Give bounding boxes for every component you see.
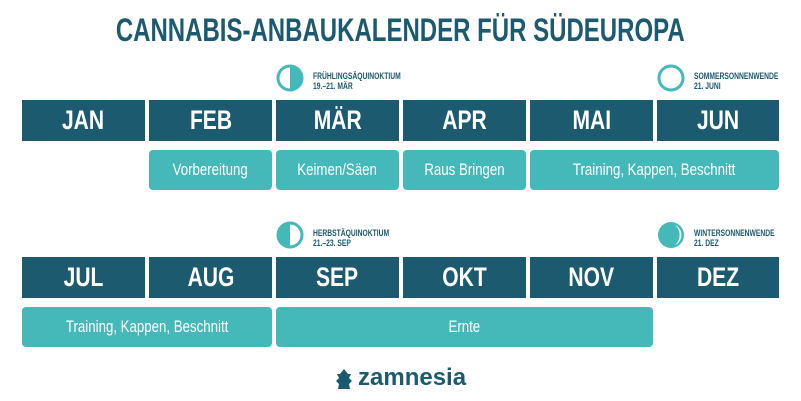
activities row 1: Keimen/Säen [298,160,377,179]
activities row 2: Training, Kappen, Beschnitt [66,317,228,336]
months row 1: MÄR [314,105,361,135]
activities row 1: Raus Bringen [424,160,505,179]
label: autumn equinox: HERBSTÄQUINOKTIUM [313,228,389,238]
icon: spring equinox [276,64,304,92]
title: CANNABIS-ANBAUKALENDER FÜR SÜDEUROPA [116,12,685,48]
activities row 1: Training, Kappen, Beschnitt [573,160,736,179]
label: summer solstice: 21. JUNI [694,81,721,91]
months row 1: MAI [572,105,611,135]
label: winter solstice [694,228,775,248]
icon: summer solstice [658,64,684,92]
months row 1: APR [442,105,487,135]
label: spring equinox [313,71,401,91]
label: autumn equinox [313,228,389,248]
icon: autumn equinox [276,222,304,248]
label: autumn equinox: 21.–23. SEP [313,238,351,248]
activities row 2: Ernte [449,317,480,336]
label: winter solstice: 21. DEZ [694,238,719,248]
months row 2: DEZ [697,262,739,292]
months row 1 [22,100,779,141]
activities row 1: Vorbereitung [173,160,248,179]
months row 2: NOV [569,262,614,292]
logo: zamnesia [358,364,466,391]
months row 1: FEB [189,105,232,135]
months row 2: OKT [442,262,487,292]
activities row 2 [22,307,653,347]
label: summer solstice: SOMMERSONNENWENDE [694,71,778,81]
months row 2 [22,257,779,298]
label: winter solstice: WINTERSONNENWENDE [694,228,775,238]
months row 2: JUL [64,262,103,292]
months row 1: JUN [697,105,739,135]
label: spring equinox: 19.–21. MÄR [313,81,353,91]
months row 1: JAN [62,105,105,135]
activities row 1 [149,150,779,190]
label: summer solstice [694,71,778,91]
months row 2: SEP [316,262,359,292]
label: spring equinox: FRÜHLINGSÄQUINOKTIUM [313,71,401,81]
months row 2: AUG [187,262,234,292]
icon: winter solstice [658,222,684,248]
